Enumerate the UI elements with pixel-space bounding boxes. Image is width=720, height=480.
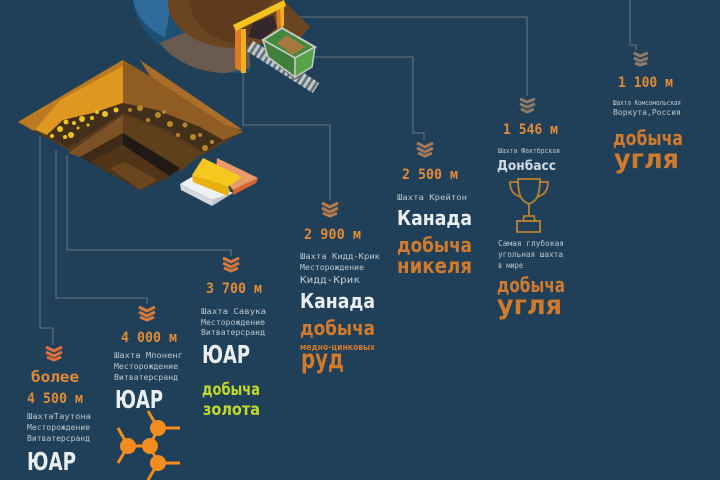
country: ЮАР bbox=[202, 340, 250, 369]
column: Kidd Creek bbox=[300, 203, 380, 375]
country: Канада bbox=[397, 206, 472, 230]
icon: chevrons bbox=[520, 99, 535, 112]
column: Donbass bbox=[497, 99, 565, 321]
column: Savuka bbox=[201, 258, 266, 420]
depth: более bbox=[31, 368, 79, 386]
mining type: добыча bbox=[397, 233, 472, 257]
illustration: mine entrance hill bbox=[133, 0, 310, 73]
column: Tau Tona: 4 500 м bbox=[27, 391, 83, 407]
mining type: добыча bbox=[202, 380, 260, 400]
mine details: Шахта Мпоненг bbox=[114, 351, 183, 360]
icon: molecule bbox=[118, 411, 180, 480]
mine details: Шахта Савука bbox=[201, 307, 266, 316]
connector lines bbox=[40, 0, 636, 345]
column: Savuka: Витватерсранд bbox=[201, 328, 265, 337]
ore nuggets bbox=[50, 108, 118, 139]
illustration: mine gate and tracks bbox=[233, 0, 316, 88]
depth: 1 100 м bbox=[618, 75, 673, 91]
column: Creighton: никеля bbox=[397, 254, 472, 278]
column: Tau Tona: Месторождение bbox=[27, 423, 90, 432]
mine details: ШахтаТаутона bbox=[27, 412, 91, 421]
column: Tau Tona bbox=[27, 347, 91, 476]
column: Donbass: угля bbox=[497, 290, 562, 321]
column: Donbass: Донбасс bbox=[497, 159, 556, 174]
column: Mponeng bbox=[114, 307, 183, 480]
mine details: Шахта Комсомольская bbox=[613, 99, 681, 107]
icon: trophy bbox=[510, 179, 548, 232]
icon: chevrons bbox=[223, 258, 239, 271]
column: Kidd Creek: медно-цинковых bbox=[300, 343, 375, 353]
column: Komsomolskaya: Воркута,Россия bbox=[613, 108, 681, 117]
column: Savuka: Месторождение bbox=[201, 318, 265, 327]
depth: 2 500 м bbox=[402, 167, 458, 183]
country: ЮАР bbox=[27, 447, 76, 476]
mining type: добыча bbox=[300, 316, 375, 340]
column: Savuka: золота bbox=[203, 400, 260, 420]
icon: chevrons bbox=[322, 203, 338, 216]
column: Komsomolskaya bbox=[613, 53, 683, 175]
mining type: добыча bbox=[497, 273, 565, 297]
depth: 3 700 м bbox=[206, 281, 262, 297]
icon: chevrons bbox=[139, 307, 155, 320]
tracks bbox=[250, 46, 316, 88]
mine details: Шахта Кидд-Крик bbox=[300, 252, 380, 261]
column: Mponeng: Витватерсранд bbox=[114, 373, 178, 382]
column: Donbass: в мире bbox=[498, 261, 523, 270]
icon: mine cart bbox=[263, 28, 315, 80]
column: Kidd Creek: руд bbox=[301, 344, 344, 375]
column: Kidd Creek: Месторождение bbox=[300, 263, 364, 272]
country: Канада bbox=[300, 289, 375, 313]
column: Donbass: угольная шахта bbox=[498, 250, 563, 259]
note: Самая глубокая bbox=[498, 238, 564, 248]
column: Creighton bbox=[397, 143, 472, 278]
column: Mponeng: Месторождение bbox=[114, 362, 178, 371]
mining type: добыча bbox=[613, 126, 683, 150]
mine details: Шахта Крейтон bbox=[397, 193, 467, 202]
depth: 2 900 м bbox=[304, 227, 361, 243]
country: ЮАР bbox=[115, 385, 163, 414]
mine details: Шахта Фактбрская bbox=[498, 147, 560, 155]
column: Komsomolskaya: угля bbox=[614, 144, 679, 175]
depth: 4 000 м bbox=[121, 330, 177, 346]
icon: chevrons bbox=[46, 347, 62, 360]
icon: chevrons bbox=[634, 53, 648, 65]
icon: chevrons bbox=[417, 143, 433, 156]
column: Kidd Creek: Кидд-Крик bbox=[300, 275, 360, 286]
column: Tau Tona: Витватерсранд bbox=[27, 434, 90, 443]
depth: 1 546 м bbox=[503, 122, 558, 138]
illustration: metal ingots bbox=[180, 158, 258, 206]
illustration: open pit with gold ore bbox=[18, 60, 243, 190]
